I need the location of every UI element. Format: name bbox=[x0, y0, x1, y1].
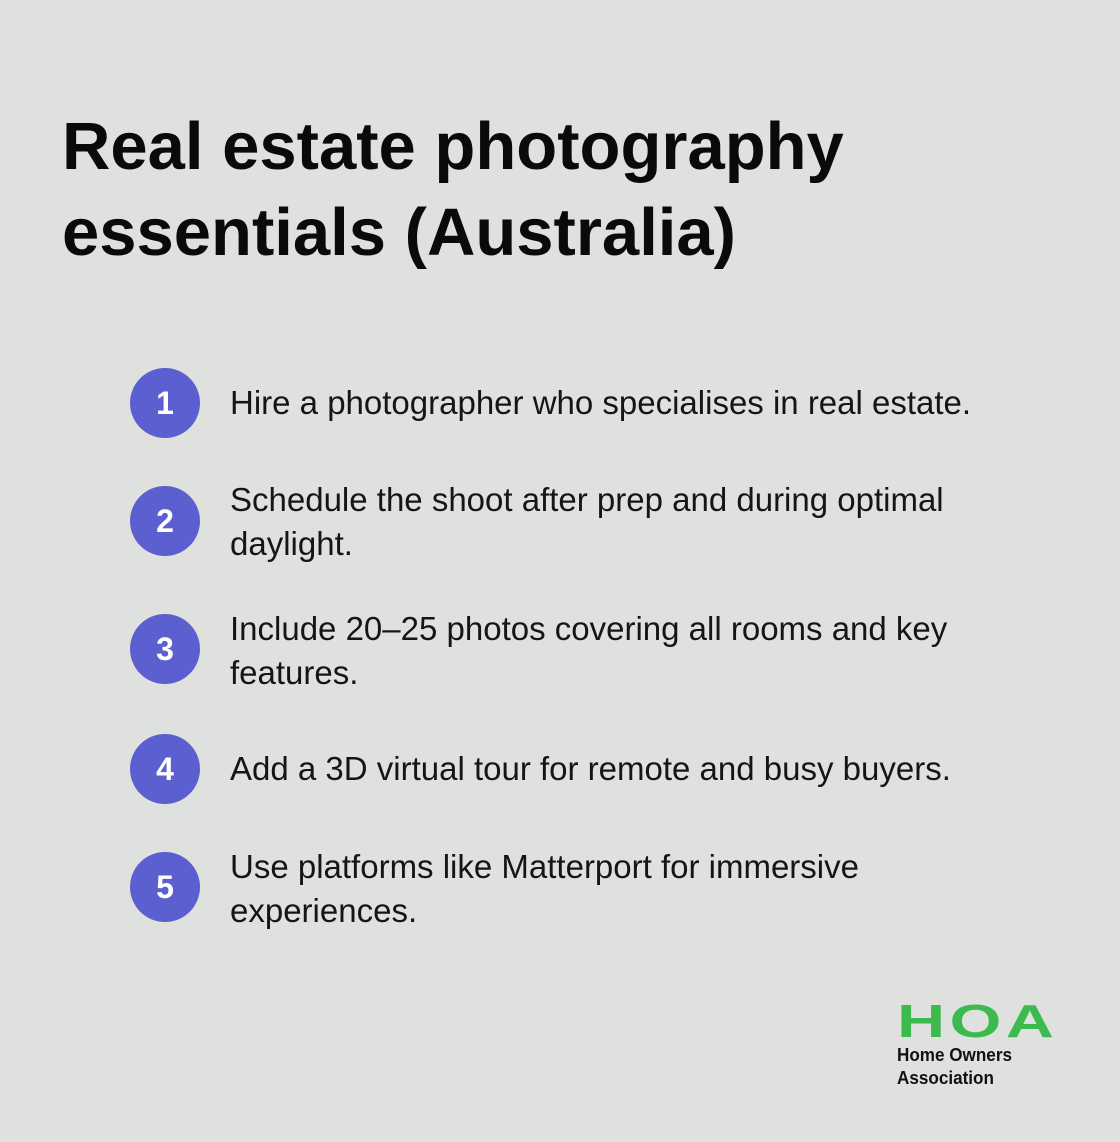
title bbox=[62, 109, 844, 270]
badge 2 bbox=[130, 486, 200, 556]
badge 4 bbox=[130, 734, 200, 804]
list item 5 bbox=[130, 848, 859, 929]
badge 5 bbox=[130, 852, 200, 922]
text 5: Use platforms like Matterport for immersive experiences. bbox=[230, 848, 859, 929]
list item 2 bbox=[130, 481, 944, 562]
logo: HOA: Association bbox=[897, 1068, 994, 1088]
badge 2: 2 bbox=[156, 503, 174, 539]
list item 3 bbox=[130, 610, 948, 691]
badge 5: 5 bbox=[156, 869, 174, 905]
badge 4: 4 bbox=[156, 751, 174, 787]
title: essentials (Australia) bbox=[62, 195, 736, 270]
badge 3: 3 bbox=[156, 631, 174, 667]
title: Real estate photography bbox=[62, 109, 844, 184]
logo: HOA: HOA bbox=[897, 995, 1058, 1047]
text 3: Include 20–25 photos covering all rooms and key features. bbox=[230, 610, 947, 691]
list item 1 bbox=[130, 368, 971, 438]
text 1: Hire a photographer who specialises in real estate. bbox=[230, 384, 971, 421]
badge 1: 1 bbox=[156, 385, 174, 421]
logo: HOA bbox=[897, 995, 1058, 1088]
logo: HOA: Home Owners bbox=[897, 1045, 1012, 1065]
text 2: Schedule the shoot after prep and during optimal daylight. bbox=[230, 481, 944, 562]
list item 4 bbox=[130, 734, 951, 804]
text 4: Add a 3D virtual tour for remote and busy buyers. bbox=[230, 750, 951, 787]
badge 3 bbox=[130, 614, 200, 684]
badge 1 bbox=[130, 368, 200, 438]
